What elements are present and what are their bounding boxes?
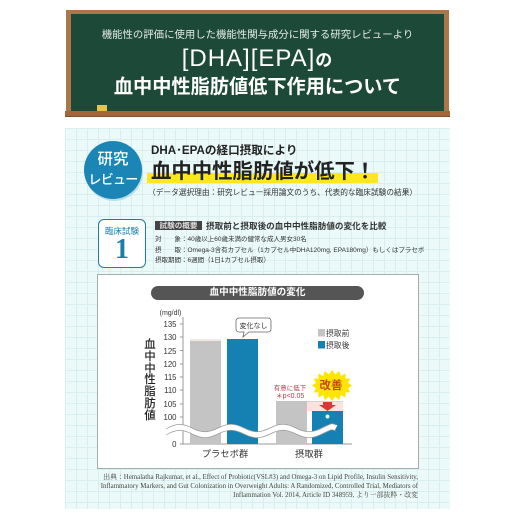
x labels xyxy=(202,448,323,459)
legend: 摂取前 xyxy=(326,328,350,338)
unit: (mg/dl) xyxy=(160,310,181,317)
tick labels: 110 xyxy=(164,386,177,395)
study details: 摂取期間：6週間（1日1カプセル摂取） xyxy=(155,257,270,264)
board subtitle: 機能性の評価に使用した機能性関与成分に関する研究レビューより xyxy=(102,30,413,41)
starburst: improvement xyxy=(312,370,352,401)
tick labels: 135 xyxy=(163,320,177,329)
citation: Inflammatory Markers, and Gut Colonization in Overweight Adults: A Randomized, Controlled Trial, Mediators of xyxy=(101,483,418,490)
study overview: 試験の概要 xyxy=(160,221,197,230)
tick labels: 100 xyxy=(163,413,177,422)
badge: research review xyxy=(84,141,142,199)
board title line 1: [DHA][EPA]の xyxy=(182,45,333,72)
placebo bars xyxy=(190,339,258,444)
axis break wave xyxy=(166,427,336,435)
intake group bars xyxy=(276,401,343,444)
badge: research review: レビュー xyxy=(88,172,138,187)
citation: Inflammation Vol. 2014, Article ID 348959, より一部抜粋・改変 xyxy=(233,492,418,499)
x labels: プラセボ群 xyxy=(202,448,248,459)
significance label: 有意に低下 xyxy=(274,383,307,392)
study details: 対 象：40歳以上60歳未満の健常な成人男女30名 xyxy=(155,236,307,243)
citation xyxy=(101,473,418,499)
axis xyxy=(180,317,352,444)
clinical trial badge xyxy=(98,219,146,268)
clinical trial badge: 1 xyxy=(115,234,129,265)
citation: 出典：Hemalatha Rajkumar, et al., Effect of Probiotic(VSL#3) and Omega-3 on Lipid Profile, Insulin Sensitivity, xyxy=(103,474,418,481)
lead text: DHA･EPAの経口摂取により xyxy=(151,144,297,157)
study details xyxy=(155,236,424,264)
down arrow xyxy=(319,402,336,411)
legend xyxy=(318,328,350,350)
chart title xyxy=(151,286,364,300)
starburst: improvement: 改善 xyxy=(320,378,342,392)
chalk eraser xyxy=(97,105,107,111)
y axis title: 血中中性脂肪値 xyxy=(144,339,156,422)
callout: no change: 変化なし xyxy=(240,321,268,330)
board title line 2: 血中中性脂肪値低下作用について xyxy=(114,77,401,98)
data marker xyxy=(326,415,329,418)
highlight headline: 血中中性脂肪値が低下！ xyxy=(151,161,375,183)
tick labels: 0 xyxy=(172,440,177,449)
grid panel xyxy=(65,128,450,509)
tick labels: 105 xyxy=(163,400,177,409)
tick labels: 115 xyxy=(164,373,177,382)
study overview: 摂取前と摂取後の血中中性脂肪値の変化を比較 xyxy=(206,221,386,231)
tick labels: 125 xyxy=(163,347,177,356)
badge: research review: 研究 xyxy=(97,151,128,168)
x labels: 摂取群 xyxy=(295,448,323,459)
tick labels: 130 xyxy=(163,333,177,342)
tray xyxy=(65,111,450,117)
clinical trial badge: 臨床試験 xyxy=(105,226,139,236)
significance label: ＊p<0.05 xyxy=(276,393,304,400)
study details: 摂 取：Omega-3含有カプセル（1カプセル中DHA120mg, EPA180mg）もしくはプラセボ xyxy=(155,247,424,254)
legend: 摂取後 xyxy=(326,340,350,350)
callout: no change xyxy=(236,318,271,337)
data selection note: （データ選択理由：研究レビュー採用論文のうち、代表的な臨床試験の結果） xyxy=(148,188,417,197)
chart title: 血中中性脂肪値の変化 xyxy=(210,287,305,298)
tick labels xyxy=(163,320,177,449)
chart panel xyxy=(97,274,419,469)
chalkboard header xyxy=(65,10,450,117)
tick labels: 120 xyxy=(163,360,177,369)
significance label xyxy=(274,383,307,400)
